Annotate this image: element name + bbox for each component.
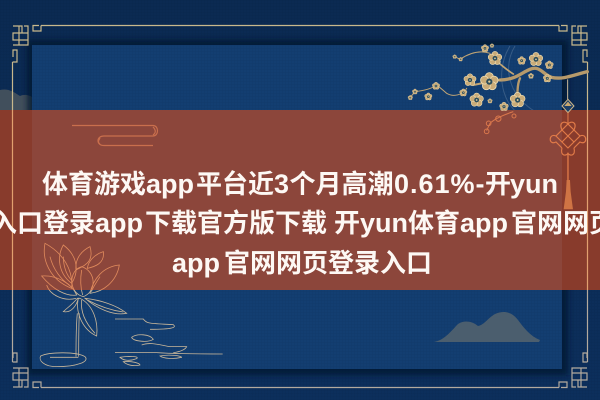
corner knot: bottom left — [12, 353, 41, 388]
title: first line: 个月高潮 — [290, 164, 394, 201]
title: third line: 官网网页登录入口 — [224, 243, 432, 280]
title: first line: app — [146, 169, 194, 199]
title: second line: 下载官方版下载 — [145, 203, 327, 240]
panel: inner blue card — [27, 40, 568, 375]
icon: lotus flower line art — [40, 243, 223, 367]
band: red translucent title strip — [0, 110, 600, 290]
icon: plum blossom branch — [408, 44, 587, 111]
mountain: lower right — [434, 312, 540, 342]
mountain: left edge — [0, 89, 32, 110]
title: second line: app — [460, 208, 508, 238]
title: first line: 3 — [274, 169, 289, 199]
title: third line: app — [172, 248, 220, 278]
icon: orange blossom twig — [484, 112, 516, 134]
title: second line: yun — [360, 208, 408, 238]
title: first line: 平台近 — [196, 164, 274, 201]
cloud: upper left in band — [72, 126, 158, 146]
decorative arcs behind branch — [502, 46, 560, 121]
corner knot: top left — [12, 26, 41, 62]
title: second line: 体育 — [408, 203, 460, 240]
title: first line: yun — [510, 169, 558, 199]
title: second line: app — [95, 208, 143, 238]
corner knot: bottom right — [559, 353, 588, 388]
icon: hanging chinese knot with tassel — [550, 79, 586, 209]
corner knot: top right — [559, 26, 588, 62]
title: first line: 开 — [485, 164, 511, 201]
title: second line: 开 — [334, 203, 360, 240]
title: first line: 0.61%- — [394, 169, 486, 199]
blossoms — [408, 44, 553, 111]
title: first line: 体育游戏 — [42, 164, 146, 201]
